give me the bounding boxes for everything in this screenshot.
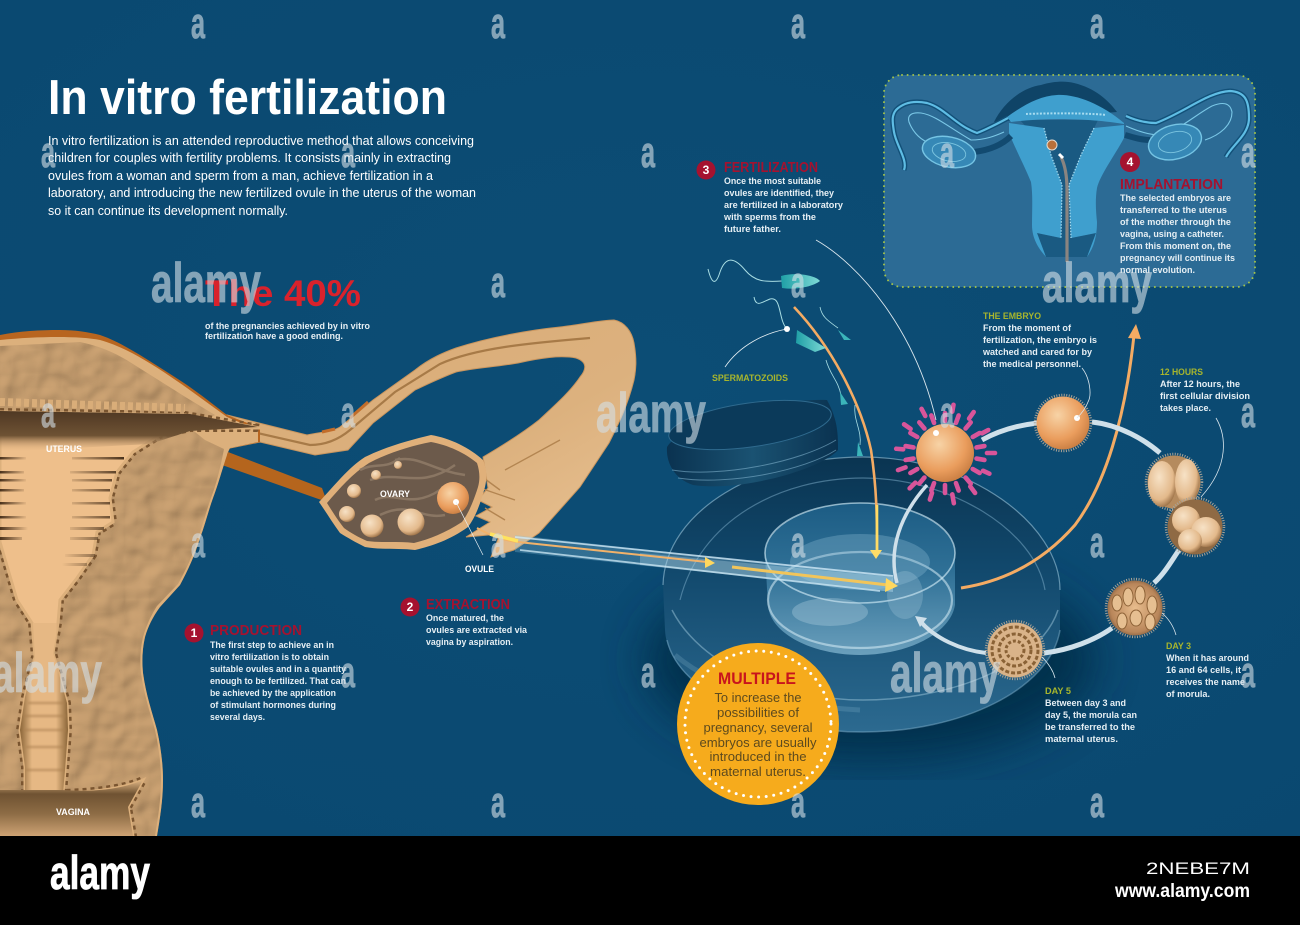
watermarks: a [41, 128, 55, 177]
step 4: implantation heading and text: transferred to the uterus [1120, 205, 1227, 216]
watermarks: a [191, 518, 205, 567]
watermarks: a [791, 518, 805, 567]
step 1: production: The first step to achieve an in [210, 640, 334, 651]
step 3: fertilization: ovules are identified, they [724, 188, 835, 199]
watermarks: a [191, 0, 205, 48]
inner dish [765, 503, 955, 655]
step 3: fertilization: Once the most suitable [724, 176, 821, 187]
step 4: implantation heading and text: pregnancy will continue its [1120, 253, 1235, 264]
intro paragraph: children for couples with fertility problems. It consists mainly in extracting [48, 150, 451, 165]
callout: 40% statistic: The 40% [205, 273, 361, 314]
footer bar: 2NEBE7M [1146, 859, 1250, 878]
watermarks: a [491, 0, 505, 48]
step 4: implantation heading and text: 4 [1127, 155, 1134, 169]
intro paragraph [48, 133, 476, 218]
step 4: implantation heading and text: normal evolution. [1120, 265, 1195, 276]
annotation: day 5: Between day 3 and [1045, 698, 1126, 709]
annotation: 12 hours [1160, 367, 1250, 497]
watermarks: a [940, 388, 954, 437]
annotation: day 3: 16 and 64 cells, it [1166, 665, 1242, 676]
step 4: implantation heading and text: IMPLANTATION [1120, 176, 1223, 193]
cell: the embryo [1035, 395, 1091, 451]
step 4: implantation heading and text: The selected embryos are [1120, 193, 1231, 204]
annotation: day 5: be transferred to the [1045, 722, 1135, 733]
cell: fertilized ovule with corona [896, 405, 995, 503]
watermarks: a [641, 128, 655, 177]
step 3: fertilization: with sperms from the [723, 212, 816, 223]
watermarks: alamy [151, 251, 261, 314]
title: In vitro fertilization [48, 71, 447, 125]
development cycle ring [894, 422, 1179, 653]
uterine cavity [0, 402, 260, 836]
footer bar [0, 836, 1300, 925]
watermarks: a [641, 648, 655, 697]
watermarks: a [791, 0, 805, 48]
callout: multiple: maternal uterus. [710, 765, 806, 779]
annotation: the embryo: the medical personnel. [983, 359, 1081, 370]
ovule label with leader [456, 502, 494, 574]
cell: blastocyst day 5 [986, 621, 1044, 679]
callout: multiple: embryos are usually [700, 736, 817, 750]
step 3: fertilization [696, 159, 844, 235]
callout: multiple: introduced in the [710, 750, 807, 764]
intro paragraph: In vitro fertilization is an attended reproductive method that allows conceiving [48, 133, 474, 148]
annotation: day 3 [1162, 613, 1249, 700]
step 2: extraction: vagina by aspiration. [426, 637, 513, 648]
label: uterus: UTERUS [46, 444, 82, 454]
watermarks: a [1090, 0, 1104, 48]
annotation: day 3: When it has around [1166, 653, 1249, 664]
cell: four-cell stage [1166, 498, 1224, 556]
intro paragraph: laboratory, and introducing the new fertilized ovule in the uterus of the woman [48, 185, 476, 200]
watermarks: a [41, 388, 55, 437]
annotation: day 5: day 5, the morula can [1045, 710, 1137, 721]
watermarks: a [1241, 388, 1255, 437]
callout: multiple: To increase the [714, 691, 802, 705]
step 2: extraction: EXTRACTION [426, 596, 510, 613]
petri dish lid [666, 392, 838, 486]
right tube [1125, 91, 1249, 157]
callout: 40% statistic: of the pregnancies achieved by in vitro [205, 321, 370, 332]
callout: multiple: MULTIPLE [718, 669, 796, 688]
intro paragraph: so it can continue its development normally. [48, 203, 288, 218]
shadow under petri dish [645, 560, 1095, 760]
watermarks: alamy [1042, 251, 1152, 314]
annotation: day 5: DAY 5 [1045, 686, 1072, 697]
ovary [319, 435, 486, 550]
extraction needle and arrows [477, 528, 898, 592]
annotation: 12 hours: first cellular division [1160, 391, 1250, 402]
watermarks: a [341, 128, 355, 177]
watermarks: a [1090, 518, 1104, 567]
annotation: day 5 [1042, 657, 1137, 745]
step 1: production [184, 622, 347, 723]
callout: multiple: pregnancy, several [704, 721, 812, 735]
callout: 40% statistic [205, 273, 370, 342]
step 1: production: PRODUCTION [210, 622, 302, 639]
annotation: the embryo: watched and cared for by [982, 347, 1093, 358]
watermarks: alamy [890, 641, 1000, 704]
step 2: extraction: Once matured, the [426, 613, 504, 624]
step 1: production: several days. [210, 712, 265, 723]
step 3: fertilization: 3 [703, 163, 710, 177]
cell: morula [1106, 579, 1164, 637]
intro paragraph: ovules from a woman and sperm from a man, achieve fertilization in a [48, 168, 434, 183]
callout: 40% statistic: fertilization have a good ending. [205, 331, 343, 342]
watermarks: a [940, 128, 954, 177]
step 1: production: vitro fertilization is to obtain [210, 652, 329, 663]
annotation: day 3: of morula. [1166, 689, 1210, 700]
annotation: day 3: DAY 3 [1166, 641, 1191, 652]
panel: implantation [884, 75, 1255, 287]
sperm cells and spermatozoids label: SPERMATOZOIDS [712, 373, 788, 384]
watermarks: a [791, 778, 805, 827]
annotation: the embryo: fertilization, the embryo is [983, 335, 1097, 346]
step 1: production: be achieved by the application [210, 688, 336, 699]
watermarks: a [1241, 128, 1255, 177]
step 1: production: enough to be fertilized. That can [210, 676, 346, 687]
left tube [893, 102, 1011, 170]
annotation: 12 hours: 12 HOURS [1160, 367, 1203, 378]
step 2: extraction: ovules are extracted via [426, 625, 528, 636]
annotation: 12 hours: After 12 hours, the [1160, 379, 1240, 390]
annotation: the embryo: From the moment of [983, 323, 1072, 334]
watermarks: a [1090, 778, 1104, 827]
watermarks: a [791, 258, 805, 307]
watermarks: a [491, 778, 505, 827]
watermarks: a [491, 258, 505, 307]
cell: two-cell stage [1146, 454, 1202, 510]
watermarks: a [341, 388, 355, 437]
watermarks: a [1241, 648, 1255, 697]
watermarks: a [491, 518, 505, 567]
step 1: production: 1 [191, 626, 198, 640]
annotation: day 5: maternal uterus. [1045, 734, 1118, 745]
watermarks: a [341, 648, 355, 697]
arrow: sperm to dish [794, 307, 882, 559]
footer bar: www.alamy.com [1114, 881, 1250, 902]
sperm cells and spermatozoids label [708, 260, 863, 456]
annotation: the embryo [982, 311, 1097, 418]
label: ovary: OVARY [380, 489, 410, 499]
annotation: the embryo: THE EMBRYO [983, 311, 1041, 322]
blue uterus diagram [893, 82, 1249, 262]
follicles [339, 461, 469, 538]
illustration: uterus, fallopian tube and ovary [0, 320, 636, 836]
step 3: fertilization: FERTILIZATION [724, 159, 818, 176]
ovarian ligament [222, 452, 327, 502]
step 4: implantation heading and text: of the mother through the [1120, 217, 1231, 228]
step 4: implantation heading and text [1120, 152, 1235, 276]
callout: multiple [677, 643, 839, 805]
annotation: 12 hours: takes place. [1160, 403, 1211, 414]
callout: multiple: possibilities of [717, 706, 800, 720]
fallopian tube [227, 320, 636, 557]
leader line: fertilization [816, 240, 936, 420]
watermarks: alamy [596, 381, 706, 444]
step 1: production: suitable ovules and in a quantity [210, 664, 347, 675]
uterus body [0, 330, 260, 836]
arrow: embryo to implantation [961, 324, 1141, 588]
step 3: fertilization: future father. [724, 224, 781, 235]
label: vagina: VAGINA [56, 807, 90, 817]
annotation: day 3: receives the name [1166, 677, 1245, 688]
step 4: implantation heading and text: From this moment on, the [1120, 241, 1231, 252]
watermarks: a [191, 778, 205, 827]
step 2: extraction [400, 596, 528, 648]
petri dish [663, 457, 1060, 732]
step 3: fertilization: are fertilized in a laboratory [724, 200, 844, 211]
step 2: extraction: 2 [407, 600, 414, 614]
ovule label with leader: OVULE [465, 564, 494, 574]
step 4: implantation heading and text: vagina, using a catheter. [1120, 229, 1224, 240]
footer bar: alamy [50, 846, 150, 899]
step 1: production: of stimulant hormones during [210, 700, 336, 711]
